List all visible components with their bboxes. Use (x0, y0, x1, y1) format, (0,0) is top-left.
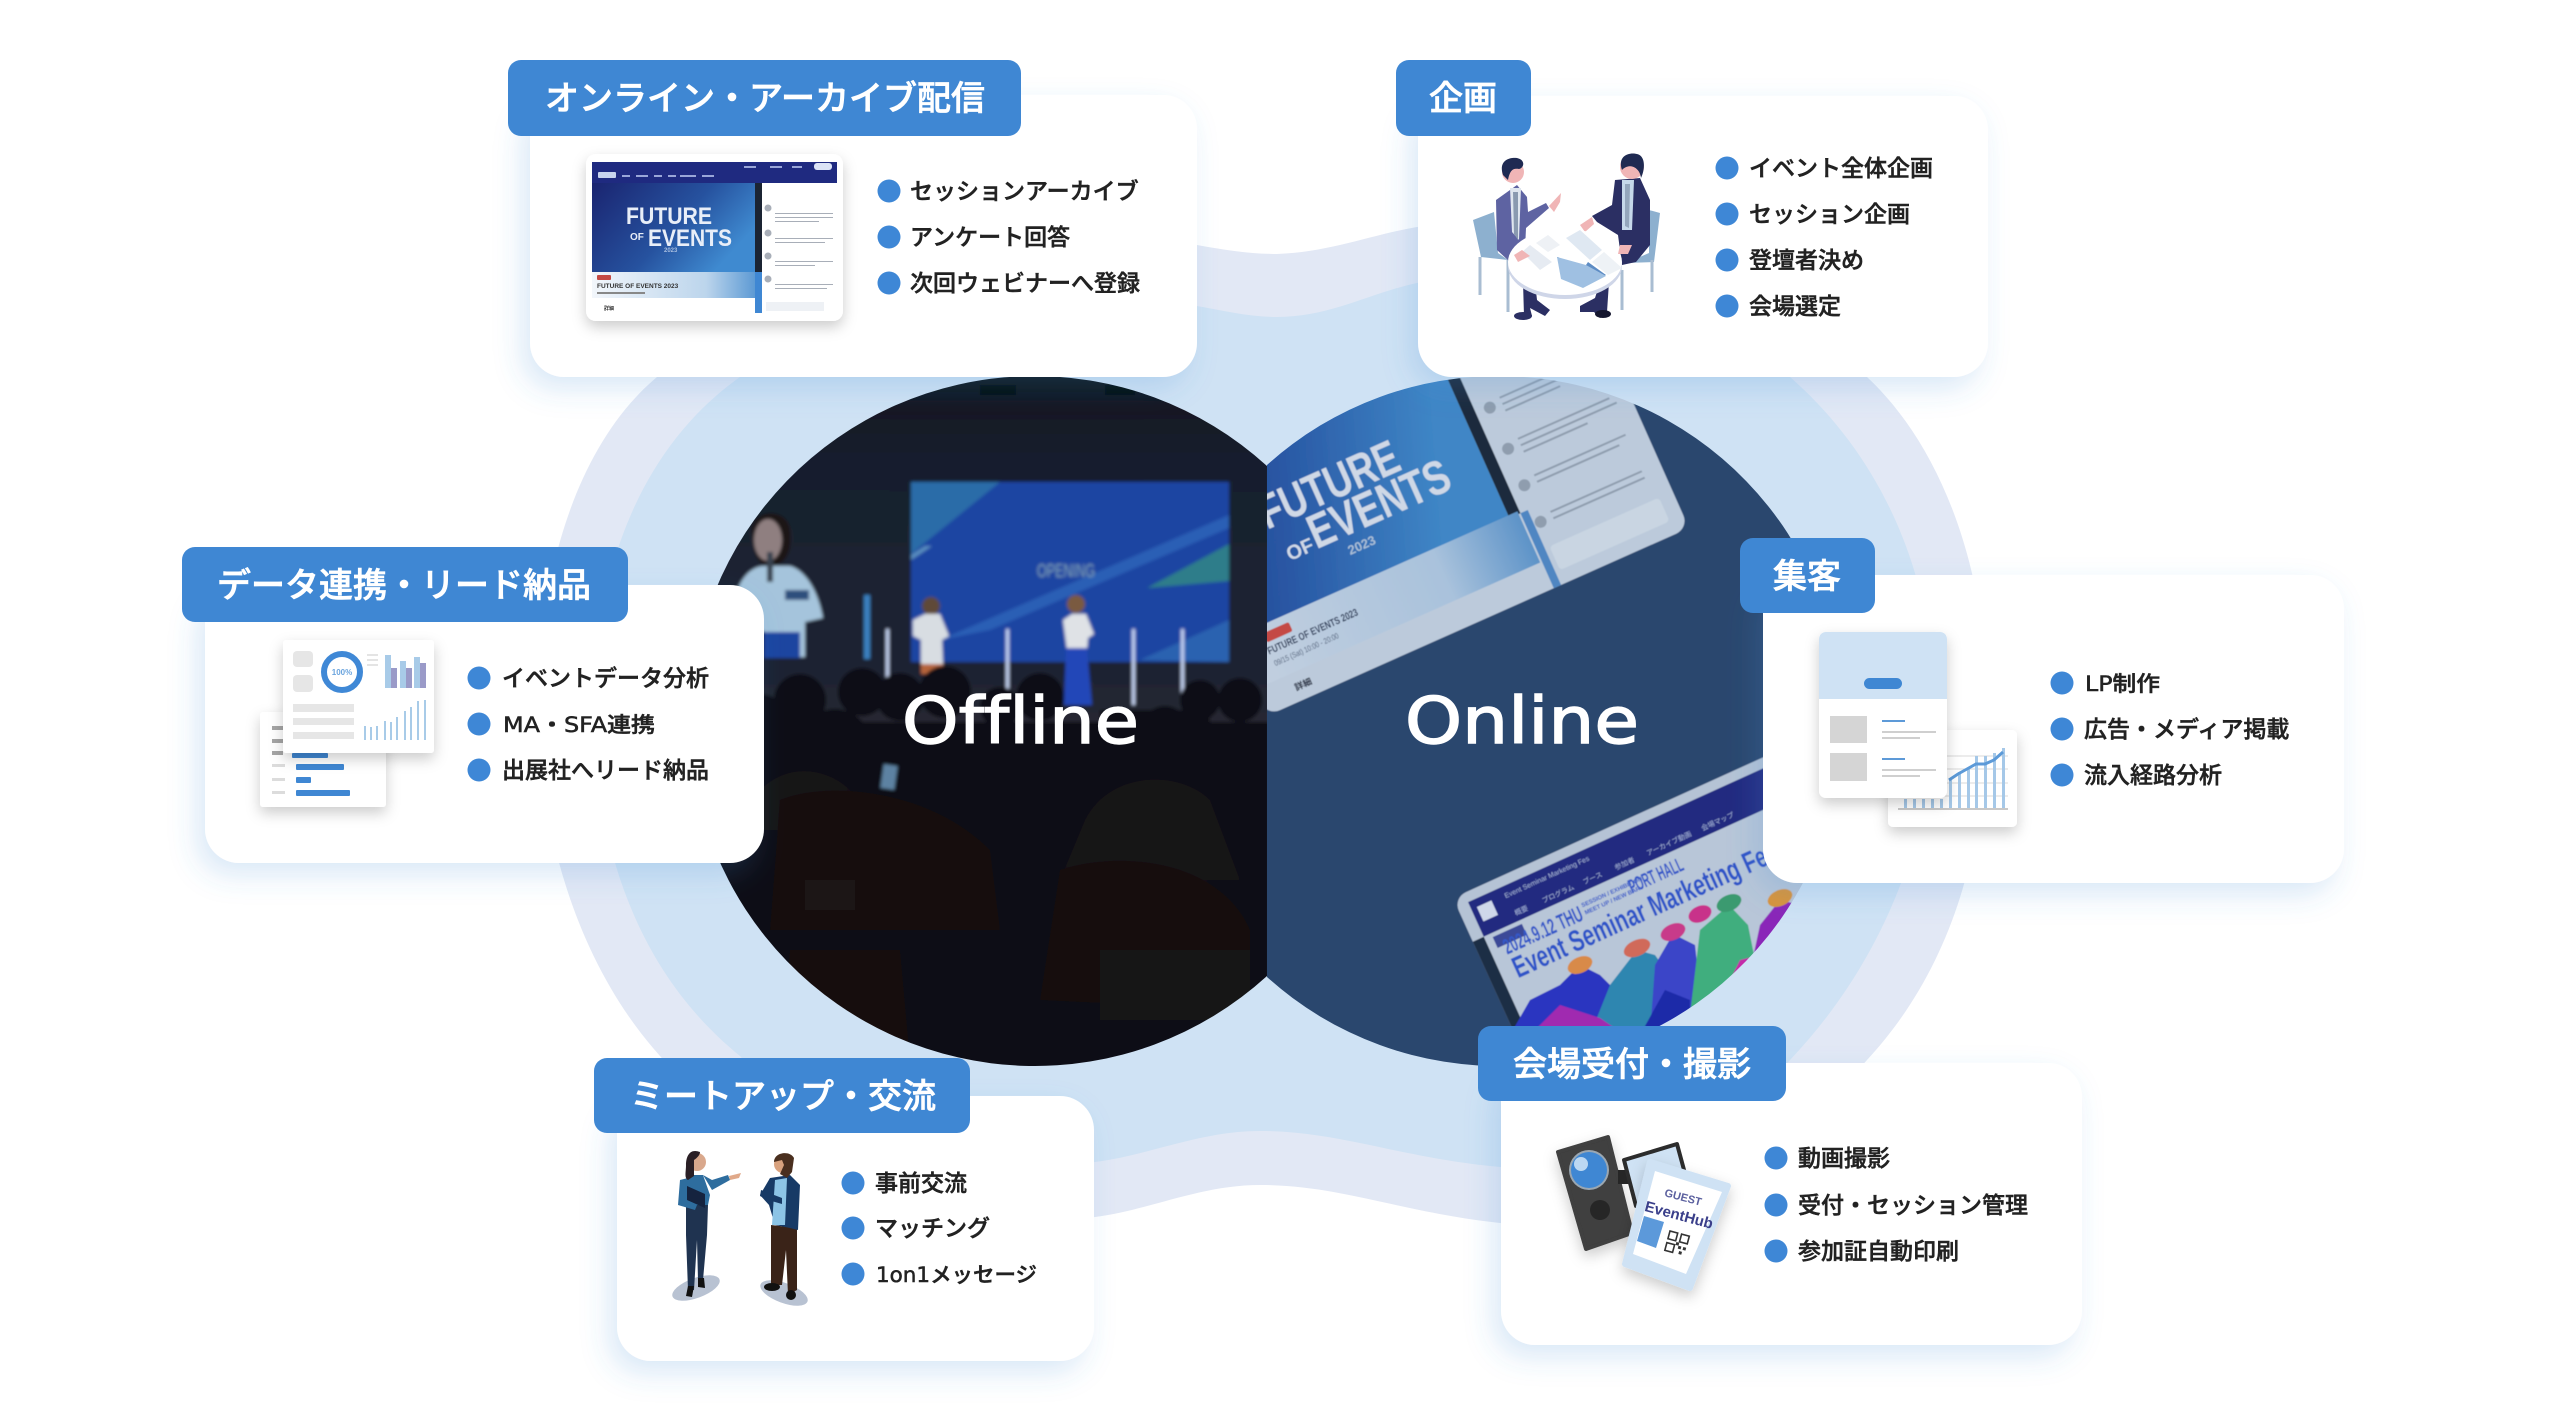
heading: venue reception: 会場受付・撮影 (1513, 1037, 1751, 1086)
tilted screenshot: Event Seminar Marketing Fes: Event Seminar Marketing Fes (1504, 855, 1591, 900)
screenshot: webinar page: OF (630, 232, 644, 243)
panel: audience acquisition (1740, 538, 2344, 883)
heading: data integration (182, 547, 628, 622)
illustration: analytics dashboards: 100% (332, 668, 352, 677)
heading: planning: 企画 (1429, 71, 1497, 120)
background: outer wave shape (538, 223, 1987, 1225)
screenshot: webinar page: 2023 (664, 248, 678, 254)
list: online archive items: 次回ウェビナーへ登録 (910, 264, 1140, 298)
illustration: camera and guest badge: GUEST (1663, 1187, 1703, 1209)
online circle with screenshots (1267, 377, 1803, 1066)
illustration: two standing people (669, 1151, 811, 1311)
panel: venue reception and filming (1478, 1026, 2082, 1345)
screenshot: webinar page: 詳細 (604, 305, 614, 312)
list: planning items: 会場選定 (1749, 287, 1841, 321)
list: acquisition items: LP制作 (2085, 672, 2160, 696)
panel: planning (1396, 60, 1988, 377)
list: venue items (1764, 1139, 2028, 1266)
tilted screenshot: Event Seminar Marketing Fes: アーカイブ動画 (1645, 829, 1693, 858)
heading: Online: Online (1405, 685, 1639, 759)
tilted screenshot: Event Seminar Marketing Fes: プログラム (1540, 882, 1576, 905)
heading: meetups (594, 1058, 970, 1133)
panel: data integration and lead delivery (182, 547, 764, 863)
tilted screenshot: Event Seminar Marketing Fes: 会場マップ (1700, 810, 1735, 833)
tilted screenshot: Event Seminar Marketing Fes: MEET UP / NEW BAR (1584, 886, 1642, 916)
stage lights (886, 629, 1184, 705)
heading: planning (1396, 60, 1531, 136)
colourful crowd artwork (1514, 888, 1793, 1026)
heading: data integration: データ連携・リード納品 (217, 558, 591, 607)
list: venue items: 受付・セッション管理 (1798, 1186, 2028, 1220)
illustration: landing page and chart (1819, 632, 2017, 827)
screenshot: webinar page: FUTURE OF EVENTS 2023 (597, 283, 679, 290)
infographic (182, 60, 2346, 1382)
list: venue items: 参加証自動印刷 (1798, 1232, 1959, 1266)
heading: audience acquisition (1740, 538, 1875, 613)
list: online archive items: アンケート回答 (910, 218, 1070, 252)
list: planning items: イベント全体企画 (1749, 149, 1933, 183)
tilted screenshot: Event Seminar Marketing Fes (1456, 756, 1803, 1026)
list: meetup items: マッチング (875, 1209, 990, 1243)
tilted screenshot: Future of Events: OF (1283, 534, 1317, 566)
stage screen: OPENING (1037, 561, 1095, 581)
screenshot: webinar page: EVENTS (648, 225, 732, 252)
tilted screenshot: Future of Events: EVENTS (1299, 450, 1459, 559)
tilted screenshot: Future of Events: 2023 (1345, 532, 1378, 558)
list: online archive items: セッションアーカイブ (910, 172, 1139, 206)
panel: meetups and networking (594, 1058, 1094, 1361)
wall display with speaker (730, 513, 823, 658)
list: data items: イベントデータ分析 (502, 659, 709, 693)
audience silhouettes (753, 664, 1267, 1066)
panel: online and archive delivery (508, 60, 1197, 377)
background: inner wave shape (594, 277, 1934, 1169)
heading: online archive: オンライン・アーカイブ配信 (545, 71, 985, 120)
speakers on stage (913, 595, 1094, 705)
tilted screenshot: Event Seminar Marketing Fes: Event Seminar Marketing Fest (1507, 833, 1790, 985)
list: planning items (1716, 149, 1933, 321)
tilted screenshot: Future of Events: 09/15 (Sat) 10:00 - 20:00 (1273, 631, 1341, 668)
list: meetup items: 1on1メッセージ (876, 1263, 1037, 1287)
tilted screenshot: Future of Events (1267, 377, 1686, 712)
heading: venue reception (1478, 1026, 1786, 1101)
tilted screenshot: Event Seminar Marketing Fes: ブース (1581, 870, 1604, 886)
illustration: camera and guest badge (1558, 1137, 1728, 1288)
list: venue items: 動画撮影 (1798, 1139, 1890, 1173)
list: data items (468, 659, 709, 785)
QR code (1665, 1231, 1689, 1255)
tilted screenshot: Future of Events: FUTURE (1250, 431, 1408, 540)
heading: Offline: Offline (902, 685, 1139, 759)
list: acquisition items: 広告・メディア掲載 (2084, 710, 2289, 744)
stage screen (911, 482, 1229, 662)
list: data items: 出展社へリード納品 (502, 751, 709, 785)
heading: meetups: ミートアップ・交流 (630, 1069, 936, 1118)
screenshot: webinar page: FUTURE (626, 203, 712, 230)
illustration: camera and guest badge: EventHub (1643, 1198, 1715, 1233)
list: planning items: セッション企画 (1749, 195, 1910, 229)
illustration: two people in a meeting (1473, 153, 1660, 320)
list: online archive items (878, 172, 1140, 298)
list: meetup items: 事前交流 (875, 1164, 967, 1198)
list: meetup items (842, 1164, 1037, 1287)
list: acquisition items: 流入経路分析 (2084, 756, 2222, 790)
illustration: analytics dashboards (260, 640, 434, 807)
tilted screenshot: Future of Events: 詳細 (1293, 675, 1314, 693)
ceiling fixtures (980, 385, 1135, 395)
tilted screenshot: Event Seminar Marketing Fes: PORT HALL (1625, 854, 1687, 898)
tilted screenshot: Event Seminar Marketing Fes: 参加者 (1613, 855, 1636, 872)
tilted screenshot: Event Seminar Marketing Fes: SESSION / EXHIBITION (1581, 876, 1643, 909)
heading: audience acquisition: 集客 (1773, 549, 1841, 598)
heading: online archive (508, 60, 1021, 136)
list: data items: MA・SFA連携 (503, 713, 655, 737)
offline circle photo (680, 370, 1270, 1072)
list: planning items: 登壇者決め (1749, 241, 1864, 275)
list: acquisition items (2050, 672, 2289, 790)
tilted screenshot: Event Seminar Marketing Fes: 2024.9.12 THU (1499, 901, 1587, 959)
screenshot: webinar page (586, 154, 843, 321)
tilted screenshot: Event Seminar Marketing Fes: 概要 (1513, 903, 1529, 917)
tilted screenshot: Future of Events: FUTURE OF EVENTS 2023 (1266, 607, 1360, 657)
